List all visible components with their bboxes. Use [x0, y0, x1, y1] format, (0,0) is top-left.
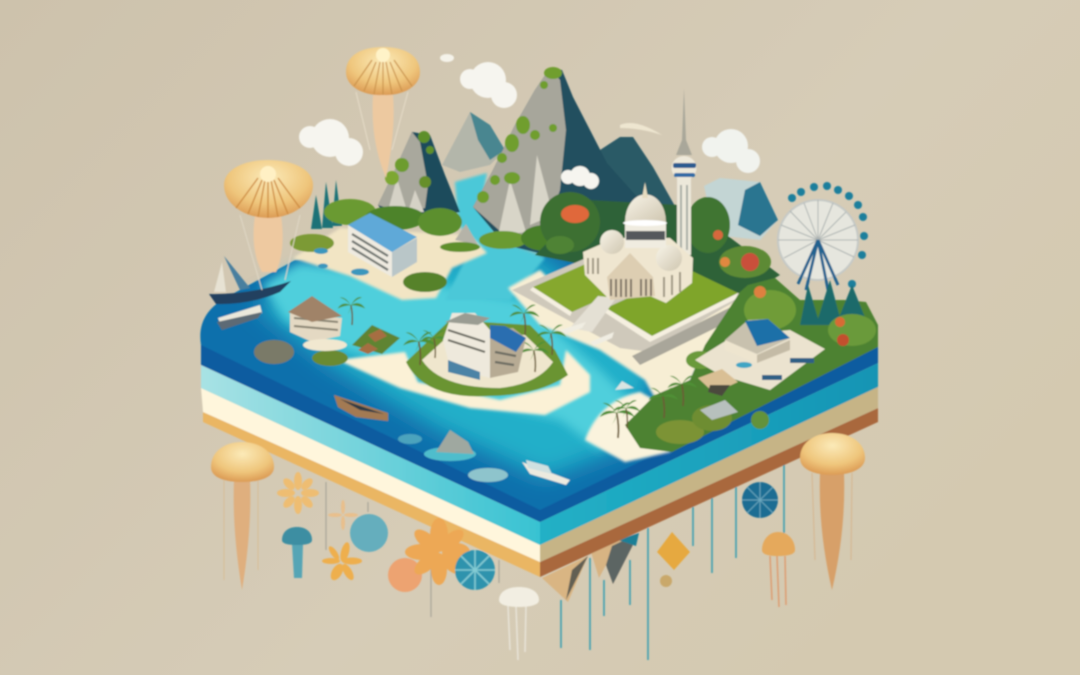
- cloud centre: [460, 62, 517, 108]
- marina boats: [560, 322, 614, 346]
- tiny cloud wisp: [440, 54, 454, 62]
- small blue jellyfish: [282, 527, 312, 578]
- sea surface: [200, 173, 878, 510]
- small orange jellyfish: [762, 532, 795, 607]
- cloud left: [299, 119, 363, 166]
- coral ball: [388, 558, 422, 592]
- teal flower: [455, 550, 495, 590]
- jellyfish top: [346, 47, 420, 178]
- hotel back left: [348, 213, 417, 277]
- ferris wheel: [778, 182, 868, 290]
- small pebble: [660, 575, 672, 587]
- pools back left: [314, 248, 369, 276]
- cloud right: [702, 129, 760, 173]
- sail boat: [209, 256, 291, 304]
- plaza shore: [508, 270, 745, 398]
- left island foliage: [290, 199, 480, 292]
- central island foliage: [403, 305, 568, 396]
- road beside plaza: [632, 300, 748, 365]
- wooden hut: [288, 296, 342, 342]
- light lagoon: [262, 262, 640, 450]
- right land: [625, 278, 878, 452]
- turquoise shallows: [255, 250, 660, 478]
- cruise boat: [522, 460, 570, 485]
- jellyfish lower left: [211, 442, 274, 590]
- orange star coral: [322, 541, 362, 582]
- domed palace: [583, 182, 693, 303]
- jellyfish right: [800, 433, 865, 590]
- rocks and greenery by hut: [254, 297, 400, 366]
- back-left beach: [293, 228, 487, 300]
- cloud small: [561, 166, 599, 189]
- plaza lawn: [530, 262, 738, 342]
- mist wisp: [620, 123, 662, 135]
- central beach: [338, 350, 590, 415]
- forest behind plaza: [535, 200, 780, 296]
- beach huts right: [698, 369, 738, 396]
- big orange flower: [405, 518, 470, 585]
- jellyfish large left: [224, 160, 313, 290]
- trees behind plaza: [686, 197, 771, 278]
- teal sand dollar: [350, 514, 388, 552]
- conifers left: [311, 180, 342, 229]
- left mountain: [378, 131, 460, 218]
- small star coral: [328, 500, 358, 530]
- illustration: [200, 47, 878, 660]
- navy sea fan: [742, 482, 778, 518]
- white ferry: [217, 305, 262, 330]
- small boat: [615, 381, 634, 390]
- south palms: [600, 376, 697, 438]
- white jellyfish: [499, 587, 539, 660]
- tower: [672, 88, 696, 255]
- underside rocks: [542, 533, 639, 602]
- plaza road: [512, 252, 745, 352]
- back dark mountain: [585, 137, 690, 255]
- wooden boat: [334, 395, 388, 421]
- distant mountains right: [704, 178, 778, 240]
- central mountain green base flowers: [540, 192, 600, 254]
- rocks in water: [398, 430, 508, 482]
- building with blue roof: [725, 319, 790, 363]
- platform side layers: [201, 340, 878, 577]
- upstream river: [445, 173, 545, 300]
- south beach: [585, 392, 690, 462]
- distant mountain back left: [442, 112, 505, 172]
- sand beaches: [293, 228, 745, 462]
- large central mountain: [473, 67, 645, 258]
- yellow coral: [657, 532, 690, 570]
- central hotel: [443, 313, 526, 380]
- coral flower cream: [277, 472, 319, 514]
- parking area: [695, 330, 825, 390]
- hanging drips under platform: [326, 463, 784, 660]
